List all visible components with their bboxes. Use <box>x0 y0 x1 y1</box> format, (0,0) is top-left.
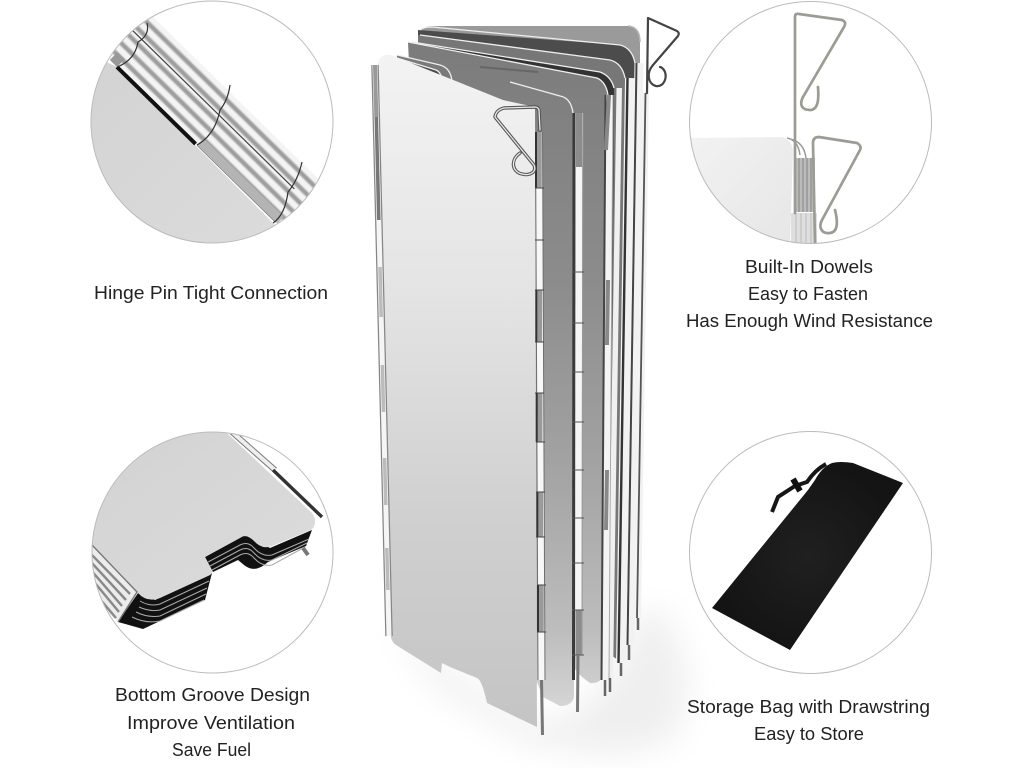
icon: black drawstring bag <box>712 462 903 650</box>
front panel <box>378 55 537 727</box>
icon: front hook <box>495 107 540 175</box>
top plate <box>80 425 315 600</box>
front right hinge <box>535 132 546 735</box>
panel: hinge pin detail <box>90 0 334 244</box>
left plate stack <box>118 573 212 629</box>
circle image: dowel hooks <box>688 14 861 245</box>
label: built-in dowels: Built-In Dowels <box>745 257 873 277</box>
hinge band <box>110 17 318 224</box>
label: storage bag: Storage Bag with Drawstring <box>687 697 930 717</box>
label: built-in dowels: Has Enough Wind Resistance <box>686 311 933 331</box>
circle image: groove plates <box>80 425 322 629</box>
hinge rods behind front panel <box>572 63 646 712</box>
corner rod <box>232 432 275 470</box>
panel: built-in dowels detail <box>688 2 932 245</box>
rear panels stack <box>385 26 640 706</box>
right plate stack <box>205 530 312 572</box>
label: bottom groove: Bottom Groove Design <box>115 685 310 705</box>
panel: storage bag detail <box>690 432 932 674</box>
label: built-in dowels: Easy to Fasten <box>748 284 868 304</box>
label: bottom groove: Improve Ventilation <box>127 713 295 733</box>
label: hinge pin: Hinge Pin Tight Connection <box>94 283 328 303</box>
front left hinge <box>375 65 389 636</box>
label: storage bag: Easy to Store <box>754 724 864 744</box>
left hinge stripes <box>92 547 138 622</box>
circle image: hinge stripes <box>92 17 318 242</box>
label: built-in dowels <box>686 257 933 331</box>
label: bottom groove: Save Fuel <box>172 740 251 760</box>
main product: folded windscreen <box>375 18 690 755</box>
ground shadow <box>385 610 690 755</box>
icon: rear hook <box>647 18 679 93</box>
label: storage bag <box>687 697 930 744</box>
label: bottom groove <box>115 685 310 760</box>
panel: bottom groove detail <box>80 425 333 673</box>
